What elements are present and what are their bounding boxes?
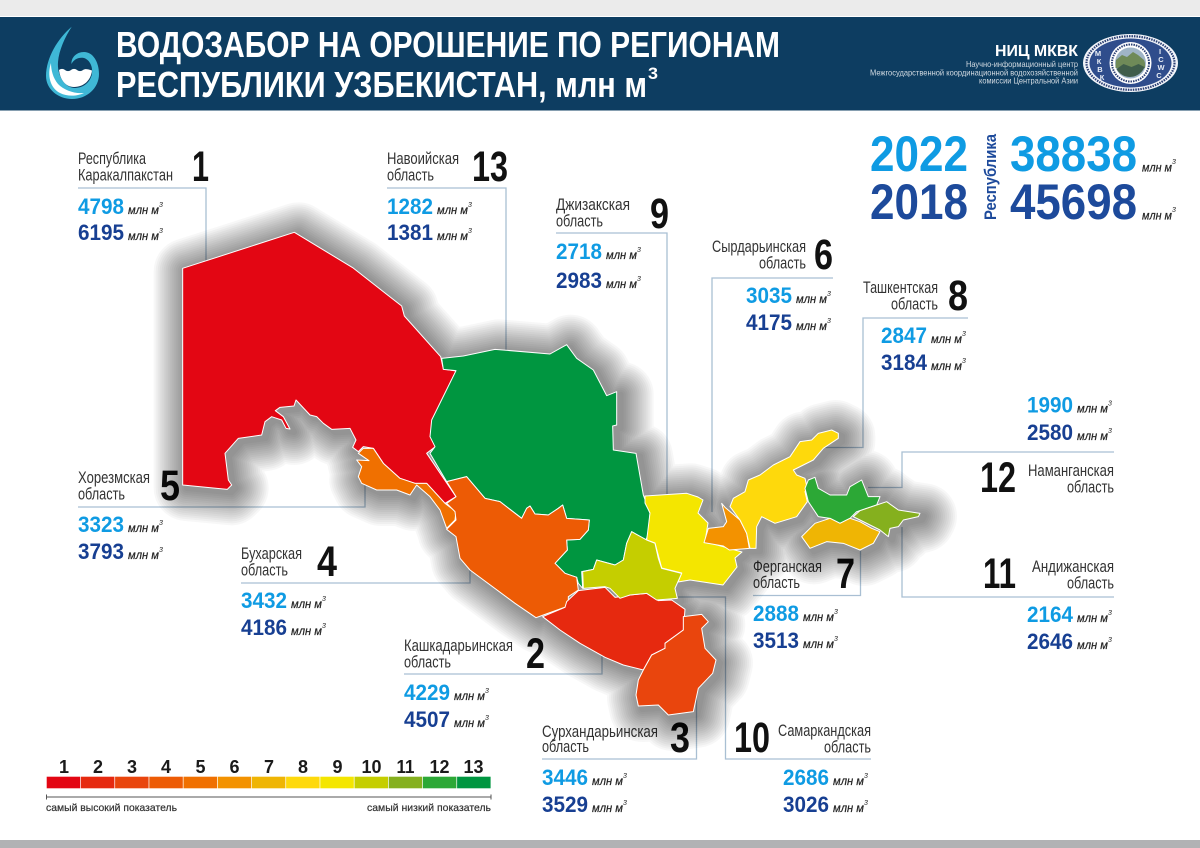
panel: region 12 Namangan: 2580 (1027, 420, 1073, 445)
panel: region 3 Surkhandarya: млн м (592, 776, 623, 788)
bottom grey band (0, 840, 1200, 848)
region: Karakalpakstan (183, 232, 456, 503)
panel: region 8 Tashkent: Ташкентская (863, 279, 938, 297)
panel: region 3 Surkhandarya (542, 690, 696, 817)
panel: region 13 Navoi: 3 (468, 202, 472, 209)
total 2022: 3 (1172, 159, 1176, 166)
legend colour scale (46, 757, 492, 814)
total 2022: млн м (1142, 162, 1172, 174)
title (116, 24, 780, 105)
panel: region 11 Andijan: млн м (1077, 640, 1108, 652)
panel: region 6 Syrdarya: млн м (796, 321, 827, 333)
panel: region 11 Andijan: 2164 (1027, 602, 1074, 627)
panel: region 1 Karakalpakstan: 1 (192, 143, 209, 191)
panel: region 6 Syrdarya: 3 (827, 291, 831, 298)
panel: region 10 Samarkand: млн м (833, 776, 864, 788)
panel: region 7 Fergana (753, 550, 860, 653)
panel: region 5 Khorezm: Хорезмская (78, 469, 150, 487)
panel: region 6 Syrdarya (712, 231, 833, 512)
panel: region 1 Karakalpakstan: 4798 (78, 194, 124, 219)
panel: region 12 Namangan: 1990 (1027, 392, 1073, 418)
panel: region 4 Bukhara (241, 538, 470, 640)
panel: region 5 Khorezm: млн м (128, 550, 159, 562)
map shadow (187, 235, 924, 718)
panel: region 8 Tashkent: млн м (931, 334, 962, 346)
panel: region 1 Karakalpakstan: млн м (128, 205, 159, 217)
panel: region 1 Karakalpakstan: 3 (159, 202, 163, 209)
panel: region 1 Karakalpakstan: Каракалпакстан (78, 166, 173, 184)
year 2022: 2022 (870, 126, 968, 182)
panel: region 7 Fergana: Ферганская (753, 558, 822, 576)
organisation text (870, 43, 1078, 86)
panel: region 5 Khorezm: 3323 (78, 512, 124, 537)
panel: region 9 Jizzakh: 2718 (556, 239, 602, 264)
panel: region 10 Samarkand: область (824, 738, 871, 756)
panel: region 13 Navoi: млн м (437, 231, 468, 243)
icon: organisation emblem: В (1097, 65, 1103, 74)
total 2018: млн м (1142, 210, 1172, 222)
region: Surkhandarya (636, 614, 716, 715)
panel: region 2 Kashkadarya: 2 (526, 630, 545, 678)
panel: region 11 Andijan: 3 (1108, 610, 1112, 617)
panel: region 13 Navoi (387, 143, 508, 350)
panel: region 8 Tashkent: 8 (948, 272, 968, 320)
panel: region 9 Jizzakh: 9 (650, 190, 669, 238)
panel: region 4 Bukhara: 4 (317, 538, 337, 586)
panel: region 3 Surkhandarya: 3 (623, 800, 627, 807)
panel: region 9 Jizzakh: млн м (606, 250, 637, 262)
panel: region 8 Tashkent: 3 (962, 358, 966, 365)
icon: organisation emblem: C (1158, 55, 1164, 64)
legend numbers: 6 (229, 757, 240, 777)
region: Bukhara (447, 477, 589, 618)
panel: region 7 Fergana: 3 (834, 609, 838, 616)
icon: organisation emblem: I (1159, 47, 1161, 56)
panel: region 4 Bukhara: 3432 (241, 588, 287, 613)
legend numbers: 3 (127, 757, 137, 777)
panel: region 1 Karakalpakstan: млн м (128, 231, 159, 243)
panel: region 10 Samarkand: млн м (833, 803, 864, 815)
region: Fergana (802, 518, 880, 550)
year 2018: 2018 (870, 174, 968, 230)
region: Khorezm (357, 448, 456, 528)
panel: region 8 Tashkent (823, 272, 968, 448)
legend numbers: 11 (396, 757, 414, 777)
legend numbers: 5 (195, 757, 206, 777)
icon: organisation emblem (1083, 34, 1178, 92)
icon: organisation emblem: W (1157, 63, 1165, 72)
panel: region 5 Khorezm (78, 462, 365, 564)
panel: region 7 Fergana: область (753, 574, 800, 592)
panel: region 8 Tashkent: область (891, 296, 938, 314)
legend numbers: 13 (464, 757, 484, 777)
icon: organisation emblem: C (1156, 71, 1162, 80)
organisation text: Научно-информационный центр (966, 59, 1078, 69)
legend numbers: 8 (298, 757, 308, 777)
panel: region 1 Karakalpakstan (78, 143, 209, 262)
panel: region 4 Bukhara: 4186 (241, 615, 287, 640)
title: 3 (648, 64, 658, 83)
title: РЕСПУБЛИКИ УЗБЕКИСТАН, млн м (116, 64, 647, 105)
panel: region 13 Navoi: 1282 (387, 194, 433, 219)
panel: region 5 Khorezm: 3793 (78, 539, 124, 564)
panel: region 10 Samarkand: 3026 (783, 792, 829, 817)
panel: region 12 Namangan: 3 (1108, 428, 1112, 435)
panel: region 6 Syrdarya: 4175 (746, 310, 792, 335)
panel: region 4 Bukhara: 3 (322, 596, 326, 603)
panel: region 2 Kashkadarya: 4507 (404, 707, 450, 732)
panel: region 4 Bukhara: область (241, 562, 288, 580)
legend caption high: самый высокий показатель (46, 802, 178, 814)
total 2018: 3 (1172, 207, 1176, 214)
panel: region 2 Kashkadarya: млн м (454, 718, 485, 730)
panel: region 4 Bukhara: млн м (291, 626, 322, 638)
panel: region 9 Jizzakh (556, 190, 669, 497)
panel: region 1 Karakalpakstan: Республика (78, 150, 147, 168)
panel: region 2 Kashkadarya: 3 (485, 688, 489, 695)
region: Syrdarya (704, 503, 749, 550)
republic totals (870, 126, 1176, 230)
organisation text: комиссии Центральной Азии (979, 76, 1078, 86)
legend numbers: 9 (332, 757, 343, 777)
panel: region 12 Namangan: 12 (980, 454, 1016, 502)
panel: region 5 Khorezm: 3 (159, 547, 163, 554)
panel: region 12 Namangan: Наманганская (1028, 462, 1114, 480)
panel: region 10 Samarkand: 3 (864, 800, 868, 807)
panel: region 2 Kashkadarya (404, 630, 602, 732)
region: Navoi (430, 345, 650, 588)
panel: region 13 Navoi: 1381 (387, 220, 433, 245)
legend numbers: 2 (93, 757, 103, 777)
legend numbers: 4 (161, 757, 171, 777)
panel: region 11 Andijan: 11 (983, 550, 1016, 598)
panel: region 8 Tashkent: 2847 (881, 323, 927, 348)
region: Samarkand (583, 532, 682, 600)
panel: region 7 Fergana: млн м (803, 612, 834, 624)
region: Andijan (853, 502, 920, 537)
panel: region 12 Namangan: 3 (1108, 400, 1112, 408)
panel: region 6 Syrdarya: млн м (796, 294, 827, 306)
total 2018: 45698 (1010, 174, 1137, 230)
panel: region 8 Tashkent: 3 (962, 331, 966, 338)
panel: region 13 Navoi: область (387, 166, 434, 184)
region: Tashkent (730, 430, 838, 548)
region: Namangan (805, 477, 880, 523)
title: ВОДОЗАБОР НА ОРОШЕНИЕ ПО РЕГИОНАМ (116, 24, 780, 65)
panel: region 5 Khorezm: 3 (159, 520, 163, 527)
panel: region 4 Bukhara: млн м (291, 599, 322, 611)
icon: organisation emblem: М (1095, 49, 1101, 58)
panel: region 12 Namangan: млн м (1077, 431, 1108, 443)
panel: region 5 Khorezm: 5 (160, 462, 180, 510)
panel: region 12 Namangan: область (1067, 478, 1114, 496)
panel: region 6 Syrdarya: 3035 (746, 283, 792, 308)
icon: water drop logo (46, 27, 99, 99)
panel: region 3 Surkhandarya: 3 (670, 714, 690, 762)
legend numbers: 10 (362, 757, 382, 777)
panel: region 12 Namangan: млн м (1077, 404, 1108, 416)
panel: region 8 Tashkent: млн м (931, 361, 962, 373)
panel: region 11 Andijan: 2646 (1027, 629, 1073, 654)
vertical label: Республика (981, 134, 1000, 220)
panel: region 11 Andijan: 3 (1108, 637, 1112, 644)
panel: region 2 Kashkadarya: область (404, 654, 451, 672)
legend blocks (47, 777, 491, 788)
panel: region 10 Samarkand: 2686 (783, 765, 829, 790)
panel: region 10 Samarkand (678, 597, 871, 817)
legend numbers: 12 (430, 757, 450, 777)
legend numbers: 7 (264, 757, 274, 777)
panel: region 2 Kashkadarya: 4229 (404, 680, 450, 705)
legend numbers: 1 (59, 757, 69, 777)
panel: region 13 Navoi: млн м (437, 205, 468, 217)
panel: region 9 Jizzakh: 2983 (556, 268, 602, 293)
panel: region 5 Khorezm: млн м (128, 523, 159, 535)
legend numbers (59, 757, 484, 777)
panel: region 7 Fergana: 3 (834, 636, 838, 643)
panel: region 9 Jizzakh: Джизакская (556, 196, 630, 214)
panel: region 3 Surkhandarya: млн м (592, 803, 623, 815)
panel: region 7 Fergana: 3513 (753, 628, 799, 653)
panel: region 9 Jizzakh: область (556, 212, 603, 230)
panel: region 10 Samarkand: 3 (864, 773, 868, 780)
organisation text: НИЦ МКВК (995, 43, 1078, 60)
panel: region 3 Surkhandarya: 3446 (542, 765, 588, 790)
panel: region 9 Jizzakh: млн м (606, 279, 637, 291)
panel: region 5 Khorezm: область (78, 486, 125, 504)
organisation text: Межгосударственной координационной водохозяйственной (870, 68, 1078, 78)
panel: region 10 Samarkand: 10 (734, 714, 770, 762)
icon: organisation emblem: К (1100, 73, 1105, 82)
panel: region 1 Karakalpakstan: 6195 (78, 220, 124, 245)
panel: region 2 Kashkadarya: Кашкадарьинская (404, 637, 513, 655)
panel: region 6 Syrdarya: область (759, 254, 806, 272)
region: Kashkadarya (543, 587, 685, 670)
panel: region 6 Syrdarya: 3 (827, 318, 831, 325)
legend axis line (46, 794, 491, 800)
header band (0, 17, 1200, 110)
panel: region 13 Navoi: Навоийская (387, 150, 459, 168)
panel: region 13 Navoi: 3 (468, 228, 472, 235)
panel: region 3 Surkhandarya: Сурхандарьинская (542, 723, 658, 741)
panel: region 11 Andijan: область (1067, 574, 1114, 592)
panel: region 11 Andijan: млн м (1077, 613, 1108, 625)
panel: region 11 Andijan: Андижанская (1032, 558, 1114, 576)
panel: region 3 Surkhandarya: область (542, 738, 589, 756)
panel: region 3 Surkhandarya: 3 (623, 773, 627, 780)
panel: region 7 Fergana: 7 (836, 550, 855, 598)
panel: region 2 Kashkadarya: млн м (454, 691, 485, 703)
legend caption low: самый низкий показатель (367, 802, 492, 814)
panel: region 10 Samarkand: Самаркандская (778, 722, 871, 740)
panel: region 4 Bukhara: Бухарская (241, 545, 302, 563)
panel: region 3 Surkhandarya: 3529 (542, 792, 588, 817)
panel: region 2 Kashkadarya: 3 (485, 715, 489, 722)
map of Uzbekistan (183, 232, 920, 715)
panel: region 1 Karakalpakstan: 3 (159, 228, 163, 235)
panel: region 12 Namangan (868, 392, 1114, 502)
region: Jizzakh (645, 493, 742, 585)
top grey band (0, 0, 1200, 16)
panel: region 7 Fergana: млн м (803, 639, 834, 651)
panel: region 6 Syrdarya: 6 (814, 231, 833, 279)
panel: region 13 Navoi: 13 (472, 143, 508, 191)
icon: organisation emblem: К (1097, 57, 1102, 66)
panel: region 9 Jizzakh: 3 (637, 276, 641, 283)
panel: region 8 Tashkent: 3184 (881, 350, 928, 375)
panel: region 6 Syrdarya: Сырдарьинская (712, 238, 806, 256)
panel: region 7 Fergana: 2888 (753, 601, 799, 626)
panel: region 11 Andijan (902, 527, 1114, 654)
panel: region 4 Bukhara: 3 (322, 623, 326, 630)
total 2022: 38838 (1010, 126, 1137, 182)
panel: region 9 Jizzakh: 3 (637, 247, 641, 254)
